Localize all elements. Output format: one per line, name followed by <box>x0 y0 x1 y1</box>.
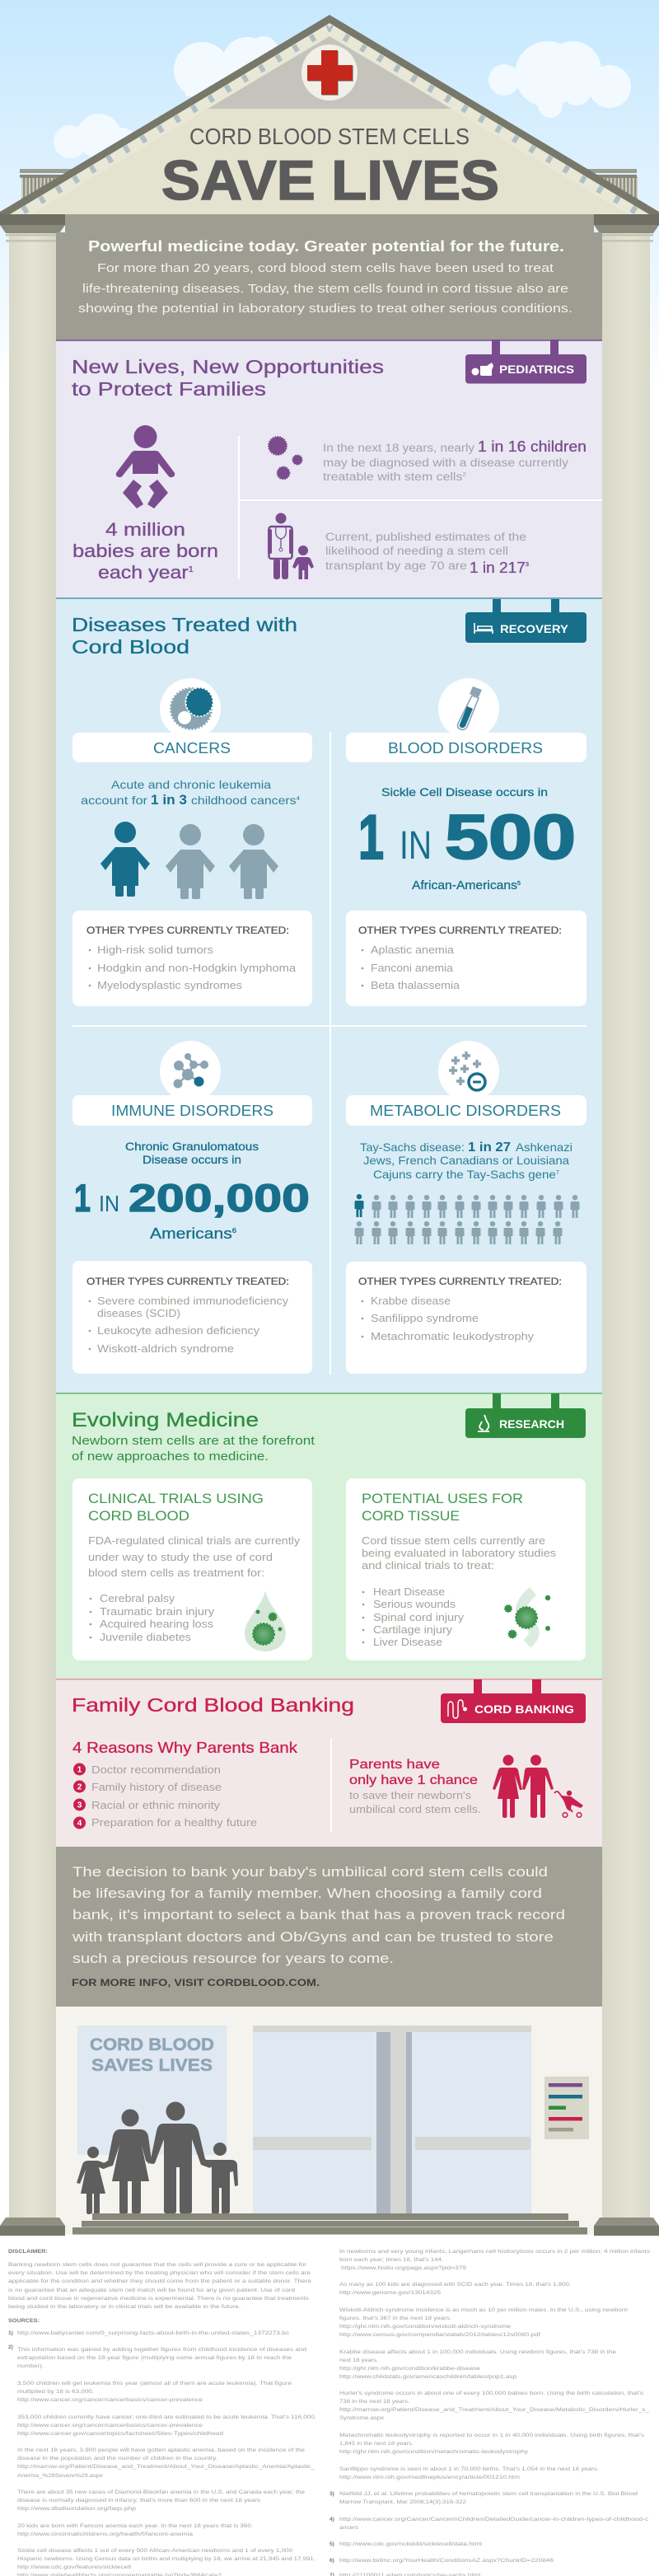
stat: 1 in 200,000 <box>74 1140 310 1242</box>
cornices <box>0 214 659 242</box>
sources left column: SOURCES: <box>8 2318 40 2324</box>
list: 4 reasons <box>72 1739 298 1829</box>
sources right column: born each year; times 18, that's 144. <box>339 2257 443 2263</box>
clouds <box>54 36 631 158</box>
stat: 1 in 16 children: 1 in 16 children <box>478 438 587 455</box>
icon: cancer cell <box>160 678 221 739</box>
sources right column: Metachromatic leukodystrophy is reported to occur in 1 in 40,000 individuals. Using birth figures, that's <box>339 2433 644 2438</box>
heading: Family Cord Blood Banking <box>72 1694 354 1716</box>
roof pediment <box>0 15 659 216</box>
card: cord tissue <box>346 1478 586 1660</box>
parapets behind roof <box>20 169 638 199</box>
list: 4 reasons: Racial or ethnic minority <box>91 1800 221 1811</box>
icon: parents and stroller <box>493 1755 583 1818</box>
heading: blood disorders <box>346 733 587 762</box>
heading: cancers <box>72 733 312 762</box>
list: immune disorders: diseases (SCID) <box>97 1308 180 1319</box>
heading: to Protect Families <box>72 378 266 400</box>
list: blood disorders: Fanconi anemia <box>371 962 453 974</box>
card: cord tissue: POTENTIAL USES FOR <box>362 1492 523 1506</box>
list: metabolic disorders: Metachromatic leukodystrophy <box>371 1331 535 1342</box>
sources right column: 5) <box>330 2541 334 2547</box>
stat: 1 in 16 children <box>323 438 587 483</box>
stat: 1 in 16 children: treatable with stem cells <box>323 471 442 483</box>
panel: intro <box>56 214 602 340</box>
card: blood disorders <box>346 678 587 1006</box>
list: immune disorders: OTHER TYPES CURRENTLY TREATED: <box>86 1277 289 1287</box>
stat: 1 in 200,000: Disease occurs in <box>143 1153 241 1166</box>
sign: research: RESEARCH <box>499 1417 564 1431</box>
heading: Evolving Medicine <box>72 1409 259 1431</box>
sources right column: https://www.histio.org/page.aspx?pid=379 <box>341 2265 467 2271</box>
disclaimer: applicable for the condition and whether they should come from the patient or a suitable donor. There <box>8 2279 312 2284</box>
stat: 1 in 217: Current, published estimates of the <box>325 531 526 543</box>
stat: 1 in 217 <box>325 531 529 576</box>
stat: leukemia: childhood cancers <box>191 794 284 807</box>
sources left column: multiplied by 18 is 63,000. <box>17 2389 94 2395</box>
icon: baby <box>116 425 175 508</box>
panel: family cord blood banking <box>56 1679 602 1847</box>
icon: test tube <box>438 678 499 739</box>
sources right column: http://www.genome.gov/13014325 <box>339 2290 442 2296</box>
card: clinical trials: under way to study the use of cord <box>88 1552 273 1563</box>
heading: immune disorders: IMMUNE DISORDERS <box>111 1102 273 1119</box>
list: metabolic disorders: OTHER TYPES CURRENTLY TREATED: <box>358 1277 562 1287</box>
sources right column: http://ghr.nlm.nih.gov/condition/metachromatic-leukodystrophy <box>339 2449 529 2455</box>
sources left column: http://www.cancer.gov/cancertopics/factsheet/Sites-Types/childhood <box>17 2431 224 2437</box>
heading <box>72 1409 315 1464</box>
sources left column: http://www.dbafoundation.org/faqs.php <box>17 2506 137 2512</box>
card: cord tissue: CORD TISSUE <box>362 1509 460 1524</box>
card: clinical trials: CLINICAL TRIALS USING <box>88 1492 264 1506</box>
panel: diseases <box>56 597 602 1393</box>
list: metabolic disorders: Sanfilippo syndrome <box>371 1313 479 1324</box>
heading: immune disorders <box>72 1095 312 1126</box>
sources left column: http://marrow.org/Patient/Disease_and_Treatment/About_Your_Disease/Aplastic_Anemia/Aplastic_ <box>17 2464 315 2470</box>
sources right column: Krabbe disease affects about 1 in 100,000 individuals. Using newborn figures, that's 738 in the <box>339 2349 617 2355</box>
stat: leukemia: Acute and chronic leukemia <box>111 778 271 791</box>
heading: Diseases Treated with <box>72 614 297 635</box>
sources left column: 2) <box>8 2344 13 2350</box>
sources right column: As many as 100 kids are diagnosed with SCID each year. Times 18, that's 1,800. <box>339 2282 571 2288</box>
stat: 1 in 200,000: IN <box>99 1191 119 1216</box>
card: clinical trials: Traumatic brain injury <box>100 1606 215 1618</box>
sources left column: number). <box>17 2363 44 2369</box>
sources right column: Sanfilippo syndrome is seen in about 1 in 70,000 births. That's 1,054 in the next 18 years. <box>339 2466 599 2472</box>
call to action text: be lifesaving for a family member. When choosing a family cord <box>72 1885 542 1901</box>
sources right column: Wiskott-Aldrich syndrome incidence is as much as 10 per million males. In the U.S., using newborn <box>339 2307 629 2313</box>
intro text <box>78 262 573 316</box>
pictogram: 1 in 27 people <box>354 1194 580 1244</box>
sources left column: 3,500 children will get leukemia this year (almost all of them are acute leukemia). That figure <box>17 2381 292 2386</box>
list: blood disorders: Beta thalassemia <box>371 980 460 991</box>
column: right <box>602 232 650 2218</box>
icon: plus and minus particles <box>438 1041 499 1102</box>
title: SAVE LIVES <box>161 149 499 212</box>
stat: 4 million babies <box>72 519 218 583</box>
icon: three children <box>100 822 278 899</box>
callout: 1 chance: only have 1 chance <box>349 1773 478 1787</box>
panel: evolving medicine <box>56 1393 602 1679</box>
heading: Cord Blood <box>72 636 189 658</box>
list: 4 reasons: 2 <box>77 1783 82 1791</box>
disclaimer: every situation. Use will be determined by the treating physician who will consider if the stem cells are <box>8 2270 311 2276</box>
list: cancers: Hodgkin and non-Hodgkin lymphoma <box>97 962 296 974</box>
heading: cancers: CANCERS <box>153 739 231 756</box>
sign: recovery: RECOVERY <box>500 622 569 635</box>
stat: 1 in 500: IN <box>400 824 432 868</box>
window poster: SAVES LIVES <box>91 2056 213 2075</box>
callout: 1 chance: to save their newborn's <box>349 1790 471 1801</box>
stat: 4 million babies: 4 million <box>105 519 185 540</box>
sources right column: http://ghr.nlm.nih.gov/condition/wiskott-aldrich-syndrome <box>339 2324 512 2330</box>
sign: cord banking <box>441 1679 586 1723</box>
call to action text: with transplant doctors and Ob/Gyns and can be trusted to store <box>72 1929 554 1945</box>
sky background <box>0 0 659 387</box>
icon: umbilical cord cells <box>505 1591 550 1644</box>
list: cancers: Myelodysplastic syndromes <box>97 980 242 991</box>
stat: 4 million babies: each year <box>98 562 178 583</box>
heading <box>72 356 384 400</box>
title <box>161 124 499 212</box>
window poster: CORD BLOOD <box>90 2035 214 2054</box>
heading: blood disorders: BLOOD DISORDERS <box>388 739 543 756</box>
column bases <box>0 2218 659 2236</box>
stat: 1 in 500: Sickle Cell Disease occurs in <box>381 785 548 799</box>
list: 4 reasons: 4 <box>77 1820 82 1828</box>
list: blood disorders: Aplastic anemia <box>371 944 454 956</box>
sources right column: http://www.bidmc.org/YourHealth/ConditionsAZ.aspx?ChunkID=220846 <box>339 2558 554 2564</box>
stat: 1 in 200,000: Americans <box>150 1225 220 1242</box>
panel: pediatrics <box>56 340 602 599</box>
list: 4 reasons: Family history of disease <box>91 1782 222 1793</box>
sources left column: http://www.cincinnatichildrens.org/health/f/fanconi-anemia <box>17 2532 194 2537</box>
list: 4 reasons: Preparation for a healthy future <box>91 1817 257 1829</box>
column: left <box>9 232 56 2218</box>
list: cancers: OTHER TYPES CURRENTLY TREATED: <box>86 926 289 936</box>
stat: leukemia <box>81 778 300 808</box>
disclaimer: blood and cord tissue in regenerative medicine is experimental. There is no guarantee that treatments <box>8 2296 309 2302</box>
medallion: red cross <box>301 44 358 101</box>
sign: pediatrics <box>465 340 587 384</box>
card: cord tissue: Liver Disease <box>373 1637 442 1648</box>
stat: leukemia: 1 in 3 <box>151 792 187 808</box>
card: clinical trials: Cerebral palsy <box>100 1593 175 1604</box>
sources right column: figures, that's 367 in the next 18 years. <box>339 2316 451 2321</box>
card: metabolic disorders <box>346 1041 587 1374</box>
building entrance <box>56 2007 602 2235</box>
stat: tay-sachs: Jews, French Canadians or Louisiana <box>363 1154 569 1167</box>
card: cord tissue: Spinal cord injury <box>373 1612 465 1623</box>
card: cord tissue: Serious wounds <box>373 1599 456 1610</box>
stat: 1 in 500: 5 <box>517 881 521 887</box>
heading: Newborn stem cells are at the forefront <box>72 1435 315 1448</box>
sources left column: Anemia_%28Severe%29.aspx <box>17 2473 104 2479</box>
list: metabolic disorders <box>346 1262 587 1374</box>
list: metabolic disorders: Krabbe disease <box>371 1295 451 1307</box>
card: clinical trials: CORD BLOOD <box>88 1509 189 1524</box>
sources right column: Marrow Transplant. Mar 2008;14(3):316-322 <box>339 2499 467 2505</box>
sources right column: In newborns and very young infants, Langerhans cell histiocytosis occurs in 2 per million; 4 million infants <box>339 2249 650 2255</box>
sources left column: http://www.cdc.gov/features/sicklecell <box>17 2564 131 2570</box>
card: clinical trials: Juvenile diabetes <box>100 1632 191 1643</box>
card: immune disorders <box>72 1041 312 1374</box>
sources left column: http://www.cancer.org/cancer/cancerbasics/cancer-prevalence <box>17 2423 203 2428</box>
stat: 1 in 16 children: 2 <box>462 472 466 478</box>
list: cancers: High-risk solid tumors <box>97 944 213 956</box>
disclaimer <box>8 2249 312 2310</box>
card: cord tissue: and clinical trials to treat: <box>362 1560 494 1571</box>
sources right column: 1,845 in the next 18 years. <box>339 2441 414 2447</box>
callout: 1 chance <box>349 1758 481 1815</box>
sources right column: 4) <box>330 2517 334 2522</box>
sources right column <box>330 2249 650 2576</box>
stat: 1 in 500 <box>358 785 576 892</box>
intro text: life-threatening diseases. Today, the stem cells found in cord tissue also are <box>82 283 568 296</box>
intro text: For more than 20 years, cord blood stem cells have been used to treat <box>97 262 554 275</box>
sources left column: This information was gained by adding together figures from childhood incidence of diseases and <box>17 2347 307 2353</box>
list: blood disorders: OTHER TYPES CURRENTLY TREATED: <box>358 926 562 936</box>
call to action text: bank, it's important to select a bank that has a proven track record <box>72 1907 565 1923</box>
heading <box>72 614 297 658</box>
stat: 1 in 16 children: may be diagnosed with a disease currently <box>323 457 568 469</box>
sources left column: disease is normally diagnosed in infancy; that's more than 600 in the next 18 years <box>17 2498 260 2503</box>
sources left column: Hispanic newborns. Using Census data on births and multiplying by 18, we arrive at 21,945 and 17,991. <box>17 2556 315 2562</box>
sources right column: ancers <box>339 2525 358 2531</box>
sources left column: disease in the population and the number of children in the country. <box>17 2456 217 2461</box>
stat: 1 in 500: 500 <box>445 803 576 873</box>
sign: research <box>465 1393 586 1438</box>
card: cord tissue: Cartilage injury <box>373 1624 453 1636</box>
sources right column: http://www.cancer.org/Cancer/CancerinChildren/DetailedGuide/cancer-in-children-types-of-childhood-c <box>339 2517 648 2522</box>
disclaimer: being studied in the laboratory or in clinical trials will be available in the future. <box>8 2304 241 2310</box>
stat: 1 in 500: 1 <box>358 803 384 873</box>
stat: leukemia: 4 <box>297 796 300 802</box>
card: clinical trials: Acquired hearing loss <box>100 1618 213 1630</box>
sources right column: Hurler's syndrome occurs in about one of every 100,000 babies born. Using the birth calculation, that's <box>339 2391 643 2396</box>
list: immune disorders: Leukocyte adhesion deficiency <box>97 1325 260 1337</box>
sources right column: 6) <box>330 2558 334 2564</box>
callout: 1 chance: Parents have <box>349 1758 440 1772</box>
stat: 1 in 217: 1 in 217 <box>470 560 522 576</box>
stat: 1 in 200,000: Chronic Granulomatous <box>125 1140 259 1153</box>
heading: metabolic disorders: METABOLIC DISORDERS <box>370 1102 561 1119</box>
card: clinical trials: FDA-regulated clinical trials are currently <box>88 1535 301 1547</box>
sources left column: http://www.cancer.org/cancer/cancerbasics/cancer-prevalence <box>17 2397 203 2403</box>
card: cord tissue: Cord tissue stem cells currently are <box>362 1535 545 1547</box>
sources right column: http://www.nlm.nih.gov/medlineplus/ency/article/001210.htm <box>339 2475 520 2480</box>
disclaimer: is no guarantee that an adequate stem cell match will be found for any given patient. Use of cord <box>8 2288 296 2293</box>
sources right column: http://www.cdc.gov/ncbddd/sicklecell/data.html <box>339 2541 482 2547</box>
sources right column: Syndrome.aspx <box>339 2415 385 2421</box>
doors <box>253 2026 531 2213</box>
intro text: showing the potential in laboratory studies to treat other serious conditions. <box>78 302 573 316</box>
card: clinical trials: blood stem cells as treatment for: <box>88 1567 264 1579</box>
call to action text: The decision to bank your baby's umbilical cord stem cells could <box>72 1864 548 1880</box>
card: cord tissue: Heart Disease <box>373 1586 445 1598</box>
icon: doctor and child <box>268 513 314 579</box>
list: 4 reasons: 4 Reasons Why Parents Bank <box>72 1739 298 1756</box>
heading: New Lives, New Opportunities <box>72 356 384 377</box>
stat: tay-sachs: 1 in 27 <box>468 1140 511 1155</box>
disclaimer: DISCLAIMER: <box>8 2249 48 2255</box>
sources left column: 353,000 children currently have cancer; one-third are estimated to be acute leukemia. That's 116,000. <box>17 2414 316 2420</box>
call to action text <box>72 1864 565 1966</box>
icon: molecule <box>160 1041 221 1102</box>
sources left column: 1) <box>8 2330 13 2336</box>
card: cord tissue: being evaluated in laboratory studies <box>362 1548 556 1559</box>
sources left column: There are about 35 new cases of Diamond-Blackfan anemia in the U.S. and Canada each year; the <box>17 2489 306 2495</box>
stat: 1 in 217: likelihood of needing a stem cell <box>325 545 508 557</box>
list: cancers <box>72 911 312 1006</box>
intro headline: Powerful medicine today. Greater potential for the future. <box>88 238 564 255</box>
disclaimer: Banking newborn stem cells does not guarantee that the cells will provide a cure or be applicable for <box>8 2262 306 2268</box>
sign: cord banking: CORD BANKING <box>474 1703 574 1716</box>
footnotes: disclaimer and sources <box>8 2249 650 2576</box>
stat: 1 in 200,000: 1 <box>74 1176 91 1220</box>
stat: 4 million babies: babies are born <box>72 541 218 561</box>
window poster <box>77 2026 227 2155</box>
sources right column: http://ghr.nlm.nih.gov/condition/krabbe-disease <box>339 2366 481 2372</box>
stat: tay-sachs <box>360 1140 573 1181</box>
heading: metabolic disorders <box>346 1095 587 1126</box>
sources left column: 20 kids are born with Fanconi anemia each year. In the next 18 years that is 360. <box>17 2523 253 2529</box>
icon: family silhouette <box>77 2101 238 2214</box>
sources left column: Sickle cell disease affects 1 out of every 500 African-American newborns and 1 of every 1,000 <box>17 2548 293 2554</box>
stat: 1 in 16 children: In the next 18 years, nearly <box>323 442 474 454</box>
list: immune disorders: Wiskott-aldrich syndrome <box>97 1343 234 1355</box>
sign: recovery <box>465 599 587 643</box>
stat: 1 in 217: transplant by age 70 are <box>325 560 467 572</box>
icon: cells <box>269 437 302 480</box>
directory sign <box>544 2077 589 2139</box>
stat: 1 in 500: African-Americans <box>412 878 513 892</box>
stat: tay-sachs: Tay-Sachs disease: <box>360 1140 465 1154</box>
stat: tay-sachs: Ashkenazi <box>516 1140 573 1154</box>
list: 4 reasons: 3 <box>77 1801 82 1810</box>
sources left column <box>8 2318 316 2576</box>
list: 4 reasons: 1 <box>77 1765 82 1775</box>
entrance steps <box>72 2213 587 2235</box>
stat: leukemia: account for <box>81 794 147 807</box>
sources right column: next 18 years. <box>339 2358 378 2363</box>
more info link: FOR MORE INFO, VISIT CORDBLOOD.COM. <box>72 1979 320 1988</box>
stat: 4 million babies: 1 <box>189 565 194 574</box>
stat: tay-sachs: Cajuns carry the Tay-Sachs gene <box>373 1168 543 1181</box>
list: immune disorders <box>72 1261 312 1374</box>
sources right column: 738 in the next 18 years. <box>339 2399 409 2405</box>
sources right column: http://www.census.gov/compendia/statab/2012/tables/12s0080.pdf <box>339 2332 540 2338</box>
call to action text: such a precious resource for years to come. <box>72 1951 394 1966</box>
sources right column: Nietfeld JJ, et al. Lifetime probabilities of hematopoietic stem cell transplantation in the U.S. Biol Blood <box>339 2491 638 2497</box>
sign: pediatrics: PEDIATRICS <box>499 363 574 376</box>
heading: of new approaches to medicine. <box>72 1450 269 1464</box>
stat: 1 in 200,000: 6 <box>232 1227 237 1234</box>
list: 4 reasons: Doctor recommendation <box>91 1764 221 1776</box>
panel: call to action <box>56 1847 602 2007</box>
stat: 1 in 200,000: 200,000 <box>129 1176 310 1220</box>
list: immune disorders: Severe combined immunodeficiency <box>97 1295 289 1307</box>
callout: 1 chance: umbilical cord stem cells. <box>349 1804 481 1815</box>
sources left column: In the next 18 years, 3,900 people will have gotten aplastic anemia, based on the incidence of the <box>17 2447 306 2453</box>
sources right column: 3) <box>330 2491 334 2497</box>
list: blood disorders <box>346 911 587 1006</box>
card: cancers <box>72 678 312 1006</box>
stat: 1 in 217: 3 <box>526 562 529 568</box>
sources right column: http://marrow.org/Patient/Disease_and_Treatment/About_Your_Disease/Metabolic_Disorders/Hurler_s_ <box>339 2407 650 2413</box>
sources right column: http://www.childstats.gov/americaschildren/tables/pop1.asp <box>339 2374 517 2380</box>
stat: tay-sachs: 7 <box>556 1170 559 1176</box>
title: CORD BLOOD STEM CELLS <box>189 124 470 149</box>
sources left column: http://www.babycenter.com/0_surprising-facts-about-birth-in-the-united-states_1372273.bc <box>17 2330 289 2336</box>
icon: blood drop <box>245 1590 286 1651</box>
sources left column: extrapolation based on the 18-year figure (multiplying some annual figures by 18 to reach the <box>17 2355 292 2361</box>
card: clinical trials <box>72 1478 312 1660</box>
